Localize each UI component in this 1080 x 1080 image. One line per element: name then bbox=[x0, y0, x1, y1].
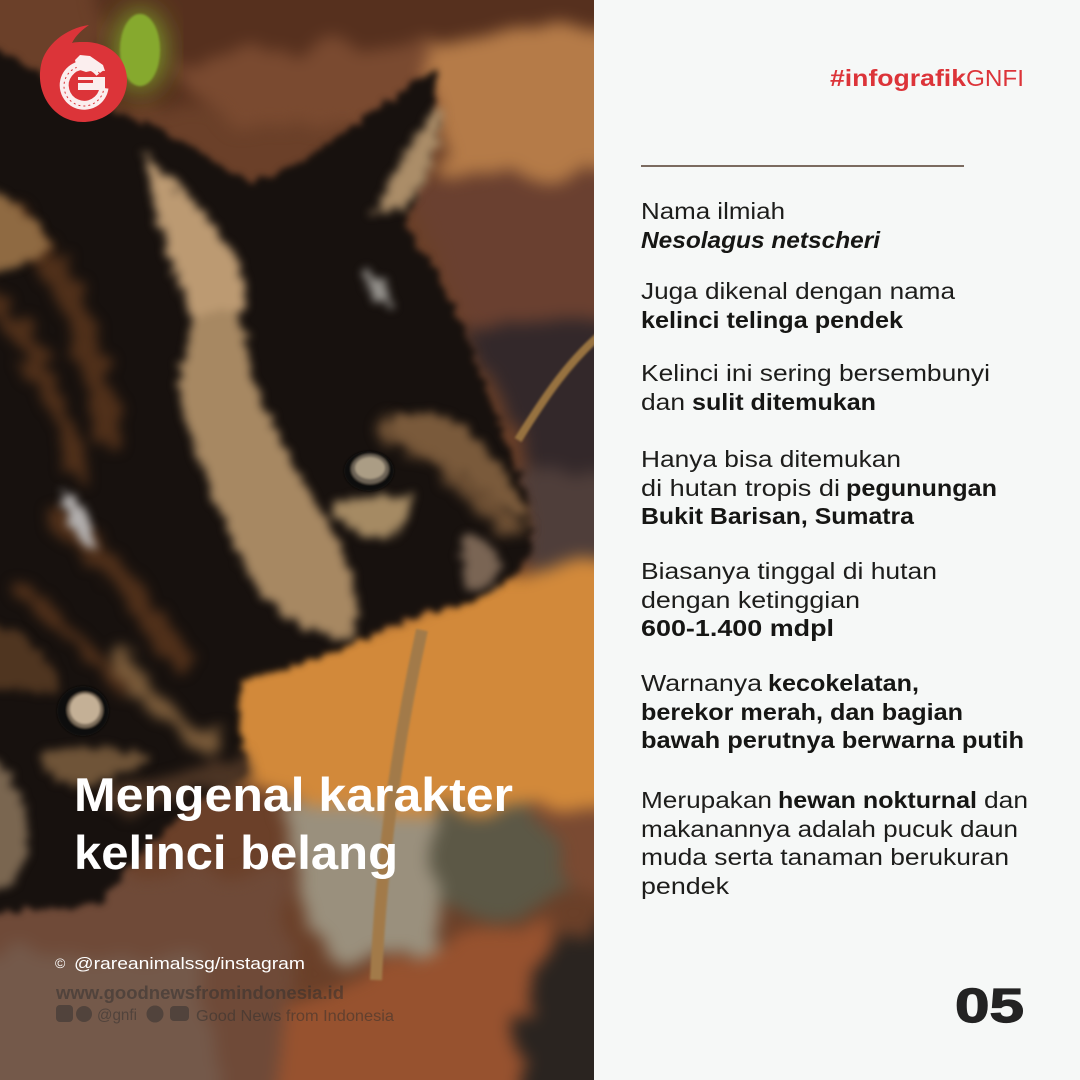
text block: altitude: dengan ketinggian bbox=[641, 587, 860, 613]
text block: scientific name: Nesolagus netscheri bbox=[641, 227, 881, 253]
title: Mengenal karakter bbox=[74, 768, 513, 821]
hashtag heading: #infografik bbox=[830, 65, 966, 91]
text block: nocturnal and diet: dan bbox=[984, 787, 1028, 813]
text block: scientific name bbox=[641, 198, 881, 253]
hashtag heading bbox=[830, 65, 1024, 91]
text block: nocturnal and diet: pendek bbox=[641, 873, 730, 899]
icon: rabbit eyes bbox=[57, 451, 394, 736]
panel: photo of striped rabbit bbox=[0, 0, 660, 1080]
text block: colouring: bawah perutnya berwarna putih bbox=[641, 727, 1024, 753]
text block: hiding behaviour: Kelinci ini sering bersembunyi bbox=[641, 360, 990, 386]
credit: website and social (dark overlay): @gnfi bbox=[97, 1007, 137, 1024]
credit: photo source bbox=[55, 957, 304, 972]
title bbox=[74, 768, 513, 879]
text block: hiding behaviour bbox=[641, 360, 990, 415]
hashtag heading: GNFI bbox=[966, 65, 1024, 91]
page number: 05 bbox=[955, 980, 1024, 1033]
icon: GNFI logo bbox=[40, 25, 127, 122]
text block: nocturnal and diet bbox=[641, 787, 1028, 899]
rabbit fur markings bbox=[0, 105, 530, 895]
text block: other name: Juga dikenal dengan nama bbox=[641, 278, 955, 304]
text block: habitat: Bukit Barisan, Sumatra bbox=[641, 503, 914, 529]
text block: habitat: di hutan tropis di bbox=[641, 475, 840, 501]
main rabbit silhouette bbox=[0, 25, 532, 915]
text block: colouring: berekor merah, dan bagian bbox=[641, 699, 963, 725]
credit: website and social (dark overlay) bbox=[55, 983, 394, 1025]
text block: other name bbox=[641, 278, 955, 333]
text block: altitude: 600-1.400 mdpl bbox=[641, 615, 834, 641]
icon: green blurred leaf bbox=[116, 10, 164, 90]
text block: colouring: Warnanya bbox=[641, 670, 762, 696]
text block: nocturnal and diet: makanannya adalah pucuk daun bbox=[641, 816, 1018, 842]
credit: photo source: @rareanimalssg/instagram bbox=[74, 954, 305, 973]
credit: website and social (dark overlay): Good News from Indonesia bbox=[196, 1008, 394, 1025]
text block: nocturnal and diet: muda serta tanaman berukuran bbox=[641, 844, 1009, 870]
text block: habitat: pegunungan bbox=[846, 475, 997, 501]
text block: habitat bbox=[641, 446, 997, 529]
text block: other name: kelinci telinga pendek bbox=[641, 307, 903, 333]
credit: website and social (dark overlay): www.goodnewsfromindonesia.id bbox=[55, 983, 344, 1003]
text block: colouring bbox=[641, 670, 1024, 753]
title: kelinci belang bbox=[74, 826, 398, 879]
text block: hiding behaviour: dan bbox=[641, 389, 685, 415]
credit: photo source: © bbox=[55, 955, 66, 971]
icon: twigs bbox=[376, 335, 600, 980]
text block: habitat: Hanya bisa ditemukan bbox=[641, 446, 901, 472]
text block: altitude bbox=[641, 558, 937, 641]
brown fur streaks bbox=[0, 220, 510, 800]
text block: nocturnal and diet: Merupakan bbox=[641, 787, 772, 813]
text block: hiding behaviour: sulit ditemukan bbox=[692, 389, 876, 415]
text block: scientific name: Nama ilmiah bbox=[641, 198, 785, 224]
text block: nocturnal and diet: hewan nokturnal bbox=[778, 787, 977, 813]
text block: altitude: Biasanya tinggal di hutan bbox=[641, 558, 937, 584]
text block: colouring: kecokelatan, bbox=[768, 670, 919, 696]
